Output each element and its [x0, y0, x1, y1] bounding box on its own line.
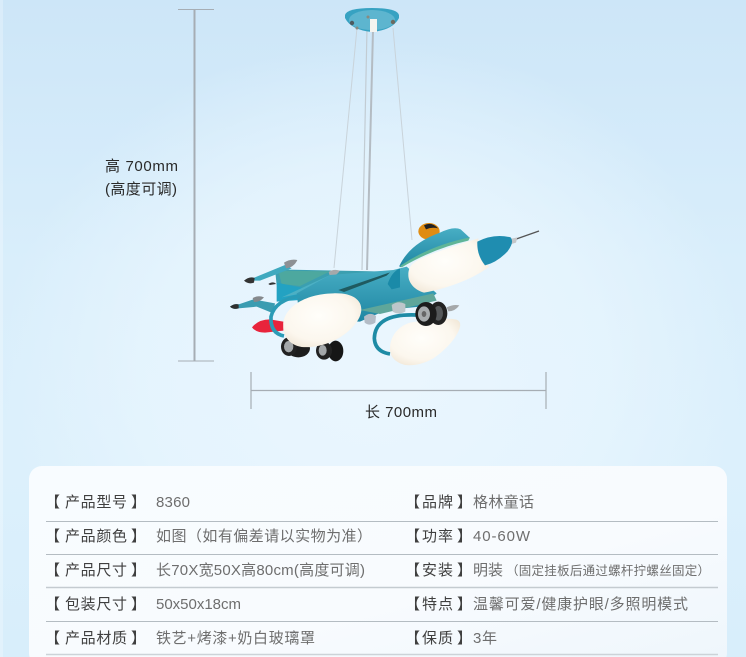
spec: material: 】	[131, 630, 146, 647]
panel: product specifications	[29, 466, 727, 657]
rear support arm	[271, 296, 300, 336]
spec: installation: 明装	[473, 562, 503, 579]
spec: installation: 安装	[422, 562, 453, 579]
spec: model: 【	[45, 494, 60, 511]
spec: power: 功率	[422, 528, 453, 545]
spec: size	[45, 562, 365, 579]
spec: brand: 格林童话	[473, 493, 534, 511]
front support arm	[374, 315, 417, 354]
height label: 高 700mm	[105, 158, 178, 175]
spec: package size	[45, 596, 241, 613]
spec: brand: 品牌	[422, 494, 453, 511]
spec: warranty	[405, 630, 497, 647]
spec: size: 】	[131, 562, 146, 579]
rear bomb	[252, 319, 283, 333]
spec: brand: 【	[405, 494, 420, 511]
spec: material: 铁艺+烤漆+奶白玻璃罩	[156, 630, 315, 647]
spec: material: 【	[45, 630, 60, 647]
wings	[230, 260, 390, 313]
spec: model: 产品型号	[65, 494, 127, 511]
spec: model: 】	[131, 494, 146, 511]
spec: power: 】	[457, 528, 472, 545]
spec: warranty: 【	[405, 630, 420, 647]
spec: installation	[405, 562, 710, 579]
spec: model: 8360	[156, 494, 190, 511]
spec: size: 【	[45, 562, 60, 579]
spec: warranty: 3年	[473, 630, 497, 647]
rear wheels	[281, 337, 343, 361]
length dimension line	[251, 372, 546, 409]
spec: features: 特点	[422, 596, 453, 613]
spec: installation: （固定挂板后通过螺杆拧螺丝固定）	[506, 563, 710, 578]
spec: warranty: 保质	[422, 630, 453, 647]
front wheels	[415, 302, 447, 326]
spec: brand	[405, 493, 534, 511]
spec: color: 】	[131, 528, 146, 545]
canopy	[399, 228, 470, 267]
row dividers	[46, 522, 718, 654]
spec: installation: 】	[457, 562, 472, 579]
rear glass shade	[283, 293, 361, 347]
spec: color: 产品颜色	[65, 528, 127, 545]
spec: power: 【	[405, 528, 420, 545]
spec: features: 温馨可爱/健康护眼/多照明模式	[473, 596, 688, 613]
spec: color: 如图（如有偏差请以实物为准）	[156, 528, 372, 545]
height label: (高度可调)	[105, 181, 177, 198]
spec: package size: 50x50x18cm	[156, 596, 241, 613]
front glass shade	[408, 238, 489, 293]
cockpit pilot helmet	[418, 223, 440, 240]
spec: package size: 【	[45, 596, 60, 613]
spec: power	[405, 528, 531, 545]
spec: features: 【	[405, 596, 420, 613]
spec: size: 长70X宽50X高80cm(高度可调)	[156, 562, 365, 579]
height label	[105, 158, 178, 198]
spec: package size: 包装尺寸	[65, 596, 127, 613]
spec: warranty: 】	[457, 630, 472, 647]
spec: color: 【	[45, 528, 60, 545]
nose cone	[477, 236, 512, 265]
height dimension line	[178, 10, 214, 361]
spec: brand: 】	[457, 494, 472, 511]
spec: installation: 【	[405, 562, 420, 579]
spec: package size: 】	[131, 596, 146, 613]
lower glass shade	[390, 319, 460, 365]
fuselage	[297, 267, 459, 325]
spec: material	[45, 630, 315, 647]
length label: 长 700mm	[365, 404, 437, 421]
antenna	[508, 231, 539, 245]
ceiling canopy and suspension wires	[334, 8, 412, 270]
airplane chandelier	[230, 223, 539, 365]
spec: features: 】	[457, 596, 472, 613]
spec: material: 产品材质	[65, 630, 127, 647]
spec: color	[45, 528, 372, 545]
spec: model	[45, 494, 190, 511]
spec: power: 40-60W	[473, 528, 531, 545]
spec: size: 产品尺寸	[65, 562, 127, 579]
